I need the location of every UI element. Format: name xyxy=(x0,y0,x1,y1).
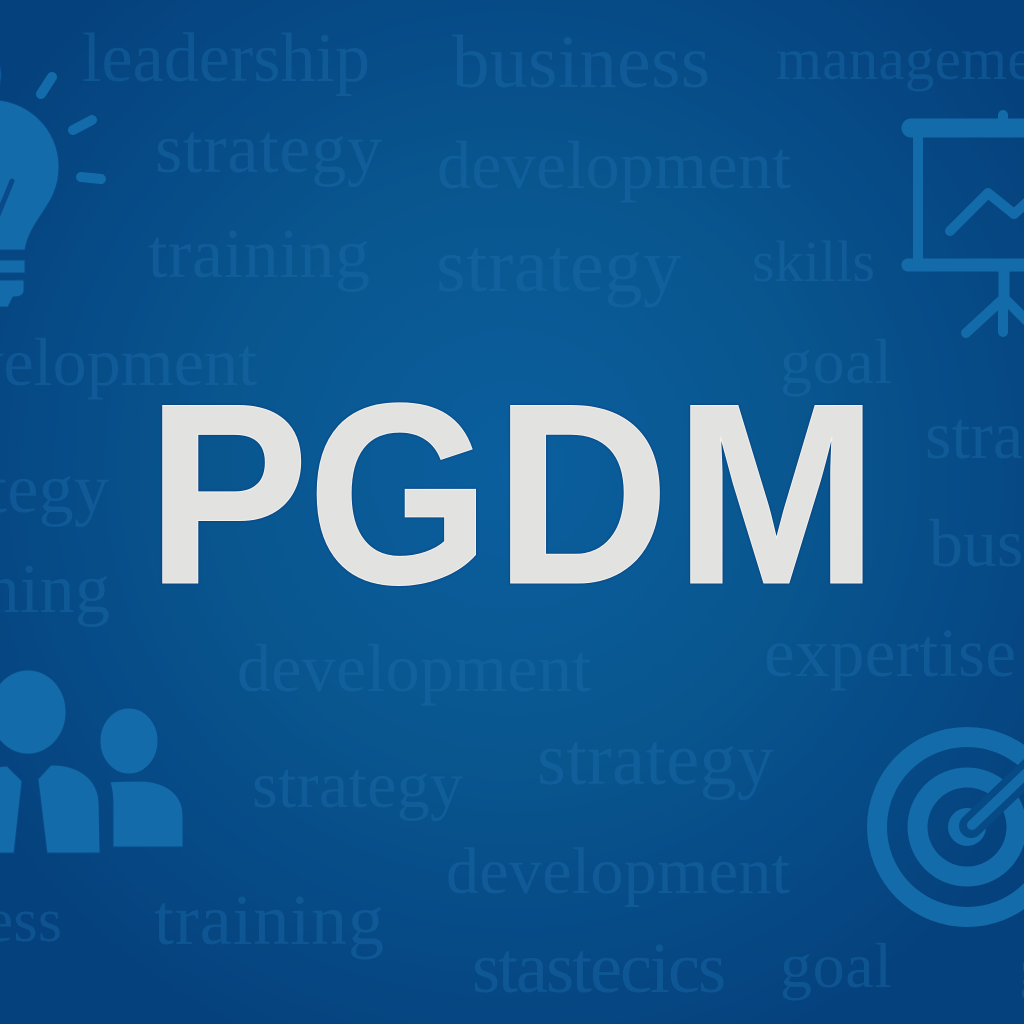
icon: presentation board xyxy=(908,115,1024,333)
title: M xyxy=(674,350,878,638)
title: P xyxy=(146,351,309,639)
icon: target with arrow xyxy=(877,737,1024,917)
background word cloud: training xyxy=(154,880,384,960)
background word cloud: expertise xyxy=(764,615,1016,691)
title: G xyxy=(308,351,490,638)
background word cloud: stastecics xyxy=(472,928,726,1008)
background word cloud: development xyxy=(437,127,791,203)
background word cloud: skills xyxy=(752,229,875,294)
background word cloud: strategy xyxy=(436,224,681,308)
icon: people xyxy=(0,670,183,853)
background word cloud: training xyxy=(148,216,370,293)
background word cloud: goal xyxy=(780,326,892,397)
background word cloud: business xyxy=(452,21,710,104)
icon: light bulb xyxy=(0,60,101,307)
background word cloud: development xyxy=(446,835,790,908)
background word cloud: leadership xyxy=(82,20,370,97)
background word cloud: goal xyxy=(780,930,892,1001)
background word cloud: strategy xyxy=(537,719,774,801)
background word cloud: development xyxy=(237,630,591,706)
title: D xyxy=(494,350,670,639)
background word cloud: strategy xyxy=(155,111,382,188)
title xyxy=(146,350,878,639)
background word cloud: strategy xyxy=(252,749,463,822)
